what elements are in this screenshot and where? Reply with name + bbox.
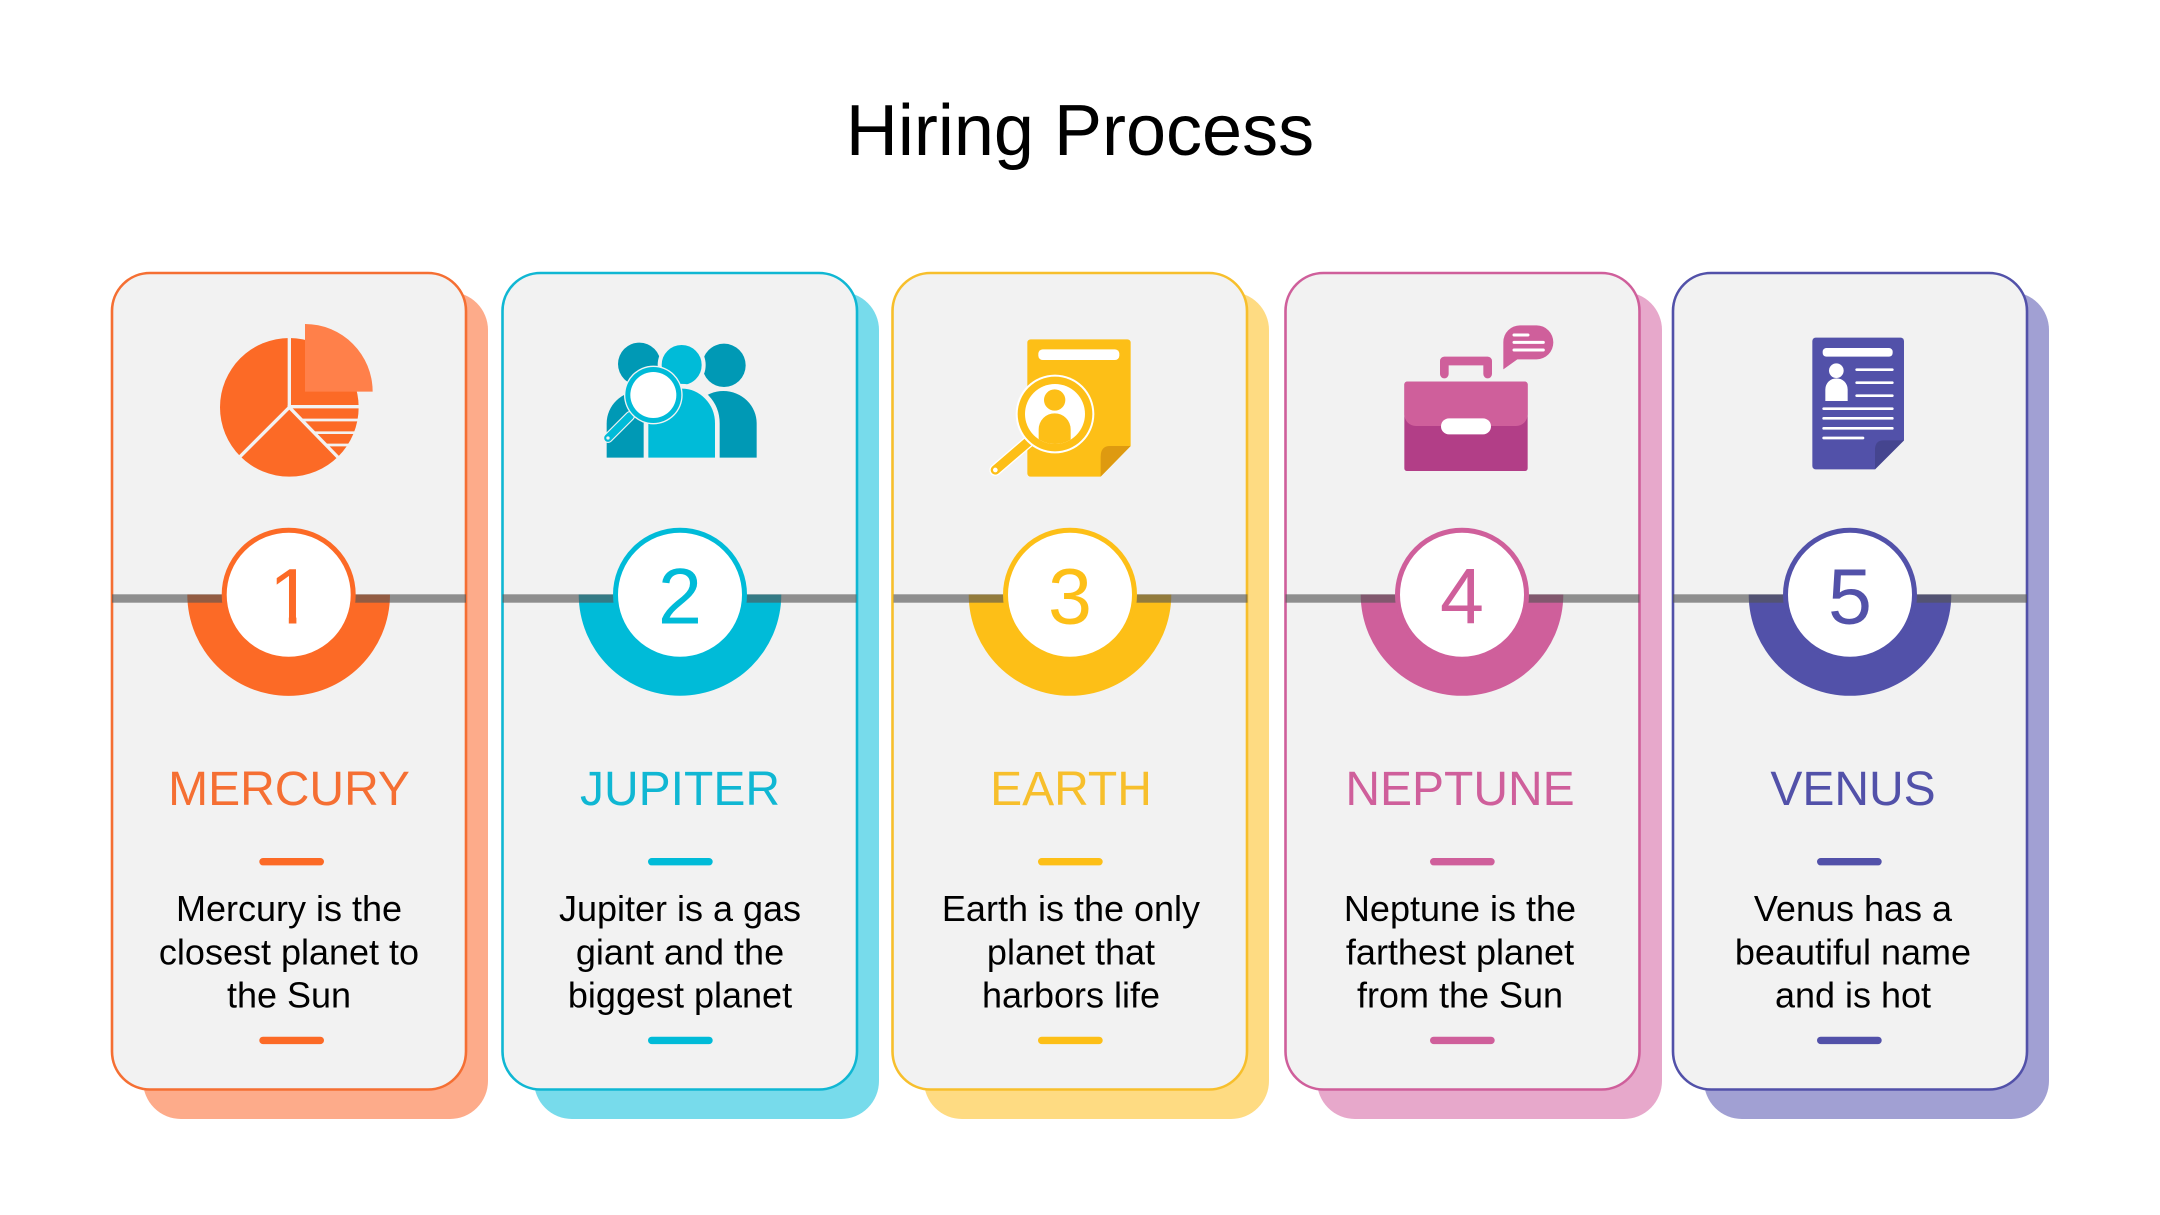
half donut [1749,594,1951,696]
card shadow [924,292,1269,1119]
description: Venus has a [1754,888,1953,929]
card [502,273,857,1090]
description: closest planet to [159,931,419,972]
half donut [1361,594,1563,696]
title: Hiring Process [846,91,1314,171]
panel: Mercury [112,273,488,1119]
description: and is hot [1775,975,1931,1016]
accent dash bottom [1038,1037,1103,1044]
description: harbors life [982,975,1160,1016]
accent dash top [259,858,324,865]
accent dash bottom [648,1037,713,1044]
icon: resume document [1812,338,1904,469]
description: farthest planet [1346,931,1574,972]
panel: Jupiter [502,273,879,1119]
icon: team with magnifier [600,343,763,462]
number badge [616,530,744,659]
card shadow [143,292,488,1119]
panel: Venus [1673,273,2049,1119]
divider line [1286,594,1640,603]
description: Neptune is the [1344,888,1576,929]
number badge: 2 [658,551,702,640]
description: beautiful name [1735,931,1971,972]
accent dash top [1817,858,1882,865]
panel: Neptune [1286,273,1662,1119]
number badge [1398,530,1526,659]
card shadow [1317,292,1662,1119]
icon: document with magnifier [993,339,1131,477]
card [112,273,466,1090]
description: the Sun [227,975,351,1016]
number badge [1006,530,1134,659]
divider line [1673,594,2027,603]
description: giant and the [576,931,784,972]
accent dash top [1038,858,1103,865]
icon: briefcase with speech bubble [1404,325,1553,471]
accent dash bottom [259,1037,324,1044]
accent dash bottom [1817,1037,1882,1044]
number badge: 4 [1440,551,1484,640]
card [892,273,1247,1090]
accent dash bottom [1430,1037,1495,1044]
icon: pie chart [220,324,373,477]
card shadow [534,292,879,1119]
number badge: 5 [1828,551,1872,640]
divider line [112,594,466,603]
divider line [894,594,1248,603]
card [1286,273,1640,1090]
divider line [502,594,856,603]
description: Mercury is the [176,888,402,929]
description: planet that [987,931,1155,972]
number badge [1786,530,1914,659]
name: MERCURY [168,763,410,816]
half donut [579,594,781,696]
panel: Earth [892,273,1269,1119]
description: Earth is the only [942,888,1200,929]
number badge [224,530,353,659]
description: biggest planet [568,975,792,1016]
name: EARTH [990,763,1152,816]
card [1673,273,2027,1090]
card shadow [1704,292,2049,1119]
name: NEPTUNE [1345,763,1575,816]
description: Jupiter is a gas [559,888,801,929]
description: from the Sun [1357,975,1563,1016]
number badge: 3 [1048,551,1092,640]
accent dash top [1430,858,1495,865]
half donut [969,594,1171,696]
number badge: 1 [269,551,313,640]
half donut [187,594,390,696]
name: VENUS [1770,763,1936,816]
accent dash top [648,858,713,865]
name: JUPITER [580,763,780,816]
